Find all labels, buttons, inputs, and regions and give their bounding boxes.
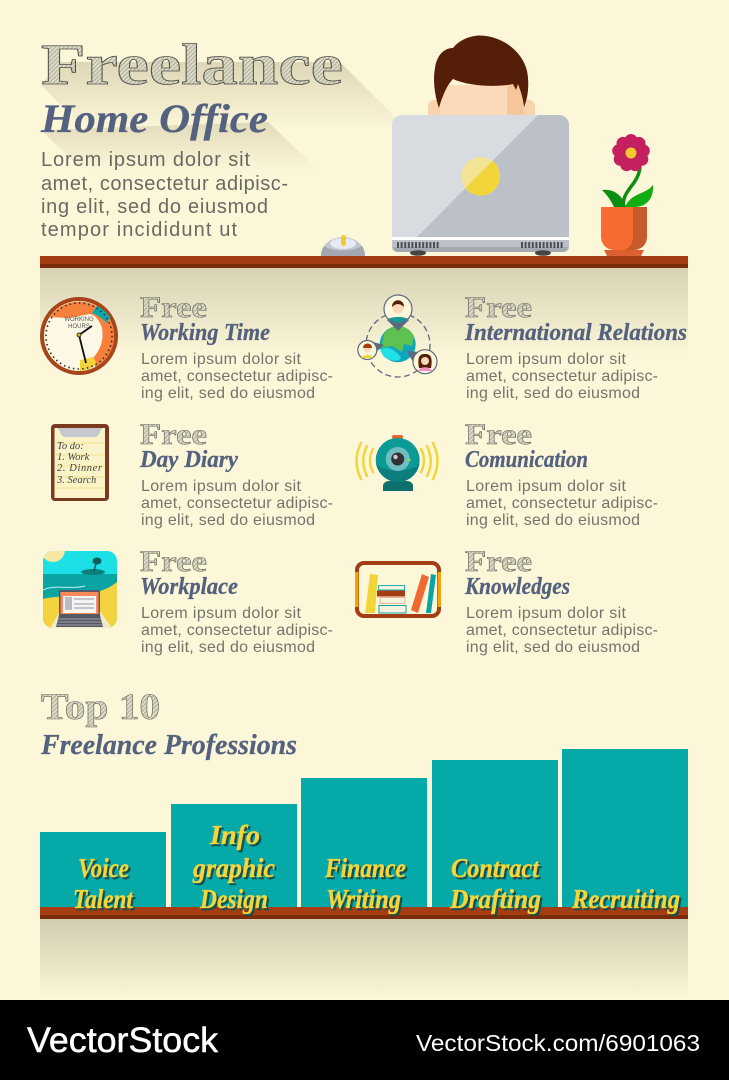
pot bbox=[601, 207, 647, 250]
floor shadow under chart bbox=[40, 919, 688, 1000]
item: Free International Relations: amet, consectetur adipisc- bbox=[466, 368, 658, 385]
item: Free Day Diary: Free bbox=[140, 418, 207, 451]
to-do text: To do: bbox=[57, 441, 84, 452]
item: Free Comunication: amet, consectetur adipisc- bbox=[466, 495, 658, 512]
item: Free Day Diary: Lorem ipsum dolor sit bbox=[141, 478, 302, 495]
illustration: laptop bbox=[392, 115, 569, 256]
item: Free Day Diary: ing elit, sed do eiusmod bbox=[141, 512, 315, 529]
item: Free International Relations: Free bbox=[465, 291, 532, 324]
label: Info graphic Design: graphic bbox=[194, 855, 277, 885]
label: Recruiting: Recruiting bbox=[571, 884, 680, 914]
person pin left bbox=[373, 342, 384, 354]
item: Free Working Time: ing elit, sed do eiusmod bbox=[141, 385, 315, 402]
item: Free Knowledges: Lorem ipsum dolor sit bbox=[466, 605, 627, 622]
label: Contract Drafting: Drafting bbox=[451, 886, 543, 916]
item: Free International Relations: ing elit, sed do eiusmod bbox=[466, 385, 640, 402]
label: Voice Talent: Voice bbox=[78, 853, 129, 883]
to-do text: 2. Dinner bbox=[57, 463, 103, 474]
item: Free Workplace bbox=[140, 545, 333, 656]
chart shelf bbox=[40, 907, 688, 919]
item: Free Knowledges bbox=[464, 545, 658, 656]
label: Contract Drafting: Contract bbox=[453, 855, 542, 885]
laptop vents bbox=[397, 242, 564, 248]
item: Free Knowledges: Knowledges bbox=[464, 574, 570, 600]
item: Free International Relations: Lorem ipsum dolor sit bbox=[466, 351, 627, 368]
item: Free Working Time: amet, consectetur adipisc- bbox=[141, 368, 333, 385]
item: Free Knowledges: ing elit, sed do eiusmod bbox=[466, 639, 640, 656]
title: Freelance: Freelance bbox=[41, 32, 343, 97]
item: Free International Relations: International Relations bbox=[464, 320, 687, 346]
item: Free Day Diary bbox=[139, 418, 333, 529]
person pin top bbox=[384, 295, 412, 323]
heading: Top 10: Top 10 bbox=[41, 687, 160, 728]
icon: international network globe bbox=[358, 295, 437, 377]
label: Info graphic Design: Info bbox=[211, 822, 262, 852]
footer logo: VectorStock bbox=[27, 1021, 219, 1060]
illustration: person behind laptop bbox=[428, 36, 535, 120]
icon: flower pot bbox=[601, 134, 653, 256]
person pin right bbox=[407, 351, 420, 364]
item: Free Comunication: Lorem ipsum dolor sit bbox=[466, 478, 627, 495]
icon: clock bbox=[40, 297, 118, 375]
top shelf bbox=[40, 256, 688, 268]
label: Contract Drafting bbox=[449, 853, 543, 916]
footer bar bbox=[0, 1000, 729, 1080]
intro text: Lorem ipsum dolor sit bbox=[41, 149, 250, 171]
icon: bookshelf bbox=[355, 563, 441, 616]
item: Free Comunication bbox=[465, 418, 658, 529]
item: Free Working Time: Free bbox=[140, 291, 207, 324]
floor shadow under top shelf bbox=[40, 268, 688, 358]
item: Free Workplace: Lorem ipsum dolor sit bbox=[141, 605, 302, 622]
to-do text: 1. Work bbox=[57, 452, 90, 463]
laptop logo bbox=[461, 157, 500, 196]
label: Contract Drafting: Contract bbox=[451, 853, 540, 883]
clock schedule ring bbox=[50, 302, 114, 367]
title long shadow bbox=[41, 62, 400, 172]
label: Finance Writing: Writing bbox=[326, 884, 401, 914]
to-do text bbox=[56, 441, 103, 486]
footer url: VectorStock.com/6901063 bbox=[416, 1030, 700, 1056]
icon: beach workplace bbox=[43, 551, 117, 628]
item: Free Workplace: ing elit, sed do eiusmod bbox=[141, 639, 315, 656]
item: Free Comunication: ing elit, sed do eiusmod bbox=[466, 512, 640, 529]
item: Free Knowledges: amet, consectetur adipisc- bbox=[466, 622, 658, 639]
item: Free Working Time: Lorem ipsum dolor sit bbox=[141, 351, 302, 368]
item: Free Day Diary: Day Diary bbox=[139, 447, 238, 473]
icon: clock: WORKING bbox=[64, 317, 94, 323]
intro text: ing elit, sed do eiusmod bbox=[41, 196, 268, 218]
label: Info graphic Design: Design bbox=[199, 884, 268, 914]
icon: clock: HOURS bbox=[68, 324, 90, 330]
to-do text: 3. Search bbox=[56, 475, 96, 486]
label: Info graphic Design: Design bbox=[201, 886, 270, 916]
label: Info graphic Design: graphic bbox=[192, 853, 275, 883]
subtitle: Home Office: Home Office bbox=[40, 96, 268, 141]
item: Free Workplace: amet, consectetur adipisc- bbox=[141, 622, 333, 639]
hair bbox=[434, 36, 528, 108]
item: Free Comunication: Free bbox=[465, 418, 532, 451]
item: Free Comunication: Comunication bbox=[465, 447, 588, 473]
label: Info graphic Design: Info bbox=[209, 820, 260, 850]
intro text: tempor incididunt ut bbox=[41, 219, 237, 241]
label: Voice Talent: Talent bbox=[73, 884, 134, 914]
label: Finance Writing: Finance bbox=[326, 855, 408, 885]
heading: Freelance Professions: Freelance Professions bbox=[40, 729, 297, 761]
ears bbox=[428, 100, 535, 120]
laptop on beach bbox=[59, 590, 100, 617]
bar chart: top freelance professions bbox=[40, 749, 688, 919]
icon: mouse bbox=[321, 235, 365, 256]
label: Recruiting: Recruiting bbox=[573, 886, 682, 916]
flower bbox=[612, 134, 650, 171]
label: Finance Writing bbox=[324, 853, 408, 916]
label: Voice Talent bbox=[73, 853, 136, 916]
label: Voice Talent: Voice bbox=[80, 855, 131, 885]
label: Finance Writing: Writing bbox=[328, 886, 403, 916]
books bbox=[365, 574, 378, 613]
globe bbox=[380, 326, 416, 362]
item: Free Working Time bbox=[140, 291, 333, 402]
item: Free Workplace: Free bbox=[140, 545, 207, 578]
intro text bbox=[41, 149, 288, 241]
label: Info graphic Design bbox=[192, 820, 277, 916]
label: Finance Writing: Finance bbox=[324, 853, 406, 883]
icon: clipboard to-do bbox=[51, 424, 109, 501]
label: Voice Talent: Talent bbox=[75, 886, 136, 916]
item: Free Workplace: Workplace bbox=[140, 574, 238, 600]
label: Contract Drafting: Drafting bbox=[449, 884, 541, 914]
item: Free Working Time: Working Time bbox=[140, 320, 270, 346]
item: Free Knowledges: Free bbox=[465, 545, 532, 578]
intro text: amet, consectetur adipisc- bbox=[41, 173, 288, 195]
face bbox=[440, 85, 524, 115]
item: Free International Relations bbox=[464, 291, 687, 402]
icon: webcam bbox=[356, 435, 438, 491]
item: Free Day Diary: amet, consectetur adipisc- bbox=[141, 495, 333, 512]
